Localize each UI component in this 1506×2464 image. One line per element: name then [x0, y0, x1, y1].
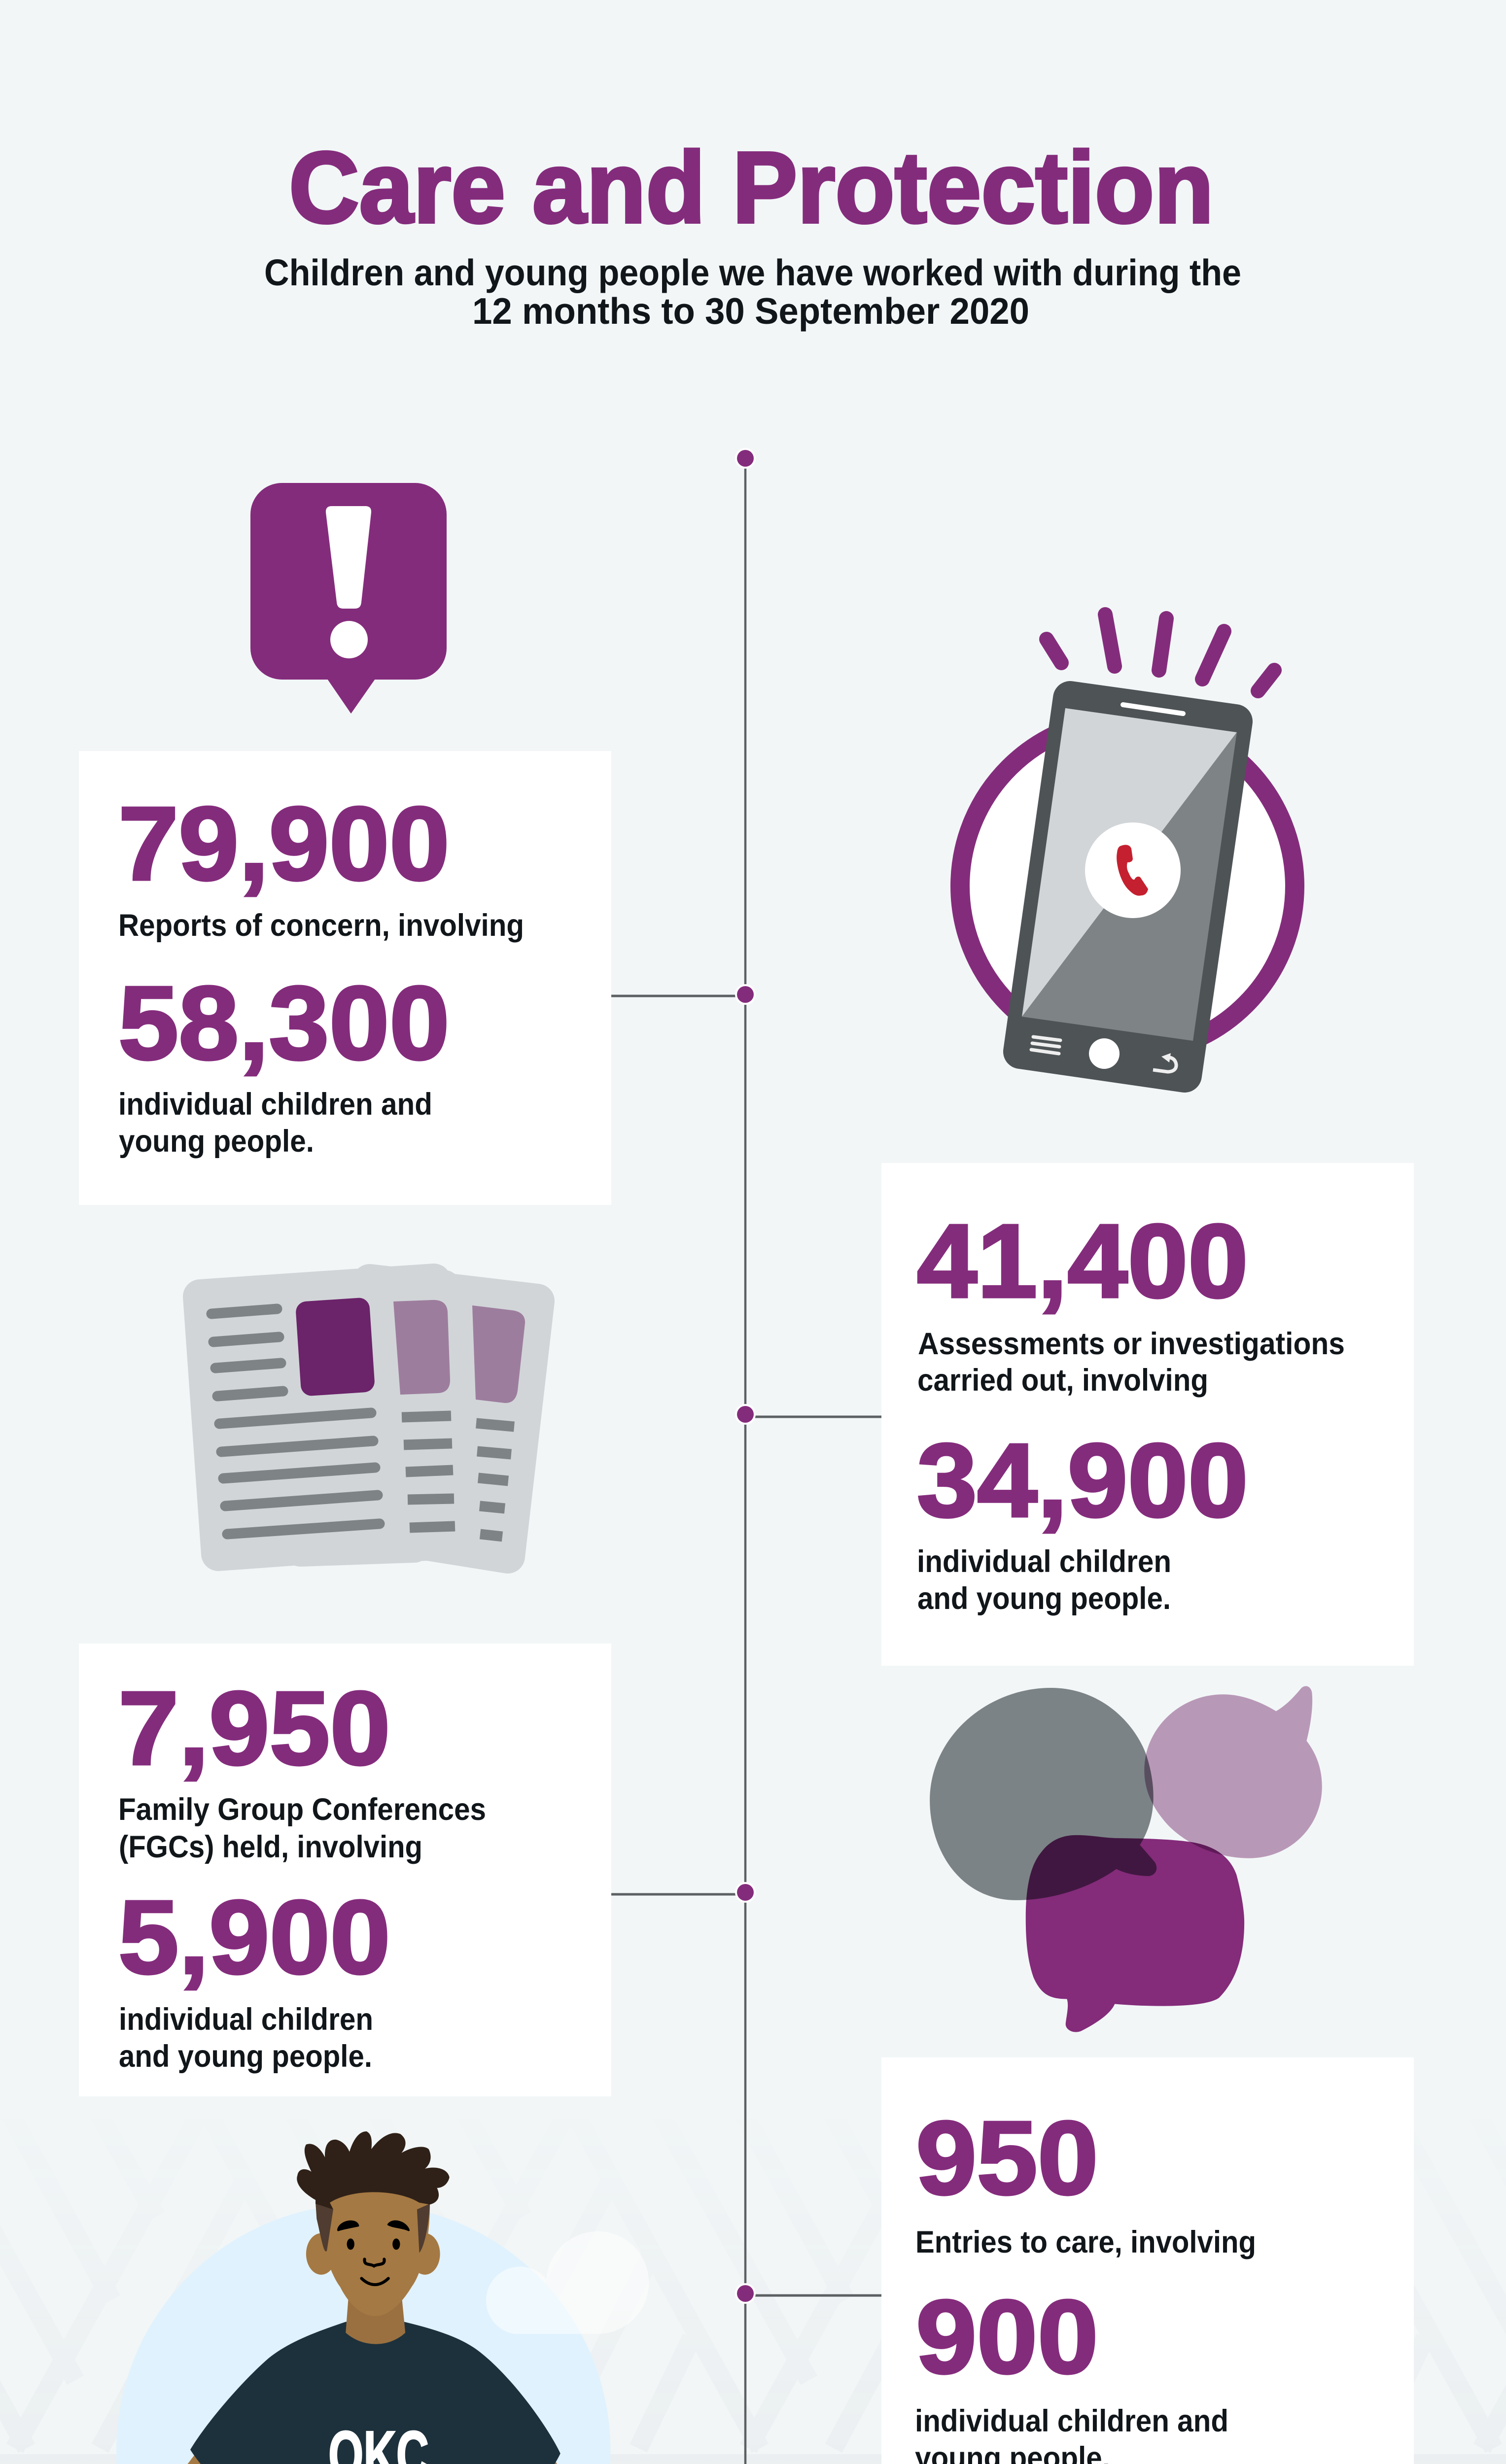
- stat: 5,900: 5,900: [118, 1879, 390, 1995]
- label: individual children: [915, 2404, 1228, 2464]
- dark purple bubble: [1026, 1835, 1244, 2032]
- stat: 7,950: 7,950: [118, 1670, 390, 1786]
- label: individual children: [119, 2002, 373, 2074]
- right picture: [472, 1305, 525, 1403]
- icon: speech bubbles: [930, 1686, 1322, 2032]
- hair: [297, 2131, 450, 2209]
- stat: 41,400: 41,400: [917, 1202, 1248, 1319]
- ringing rays: [1047, 615, 1274, 691]
- subtitle: Children and young people we have worked with during the: [264, 252, 1241, 293]
- cloud: [486, 2231, 649, 2334]
- panel: family group conferences: [79, 1643, 611, 2096]
- sideburns: [315, 2202, 333, 2252]
- middle picture: [393, 1300, 450, 1395]
- t-shirt: [190, 2322, 560, 2464]
- phone backdrop circle: [960, 719, 1295, 1054]
- icon: newspapers: [200, 1281, 537, 1556]
- subtitle: 12 months to 30 September 2020: [472, 290, 1029, 332]
- stat: 900: 900: [916, 2278, 1098, 2395]
- facial features: [338, 2221, 409, 2285]
- left column lines: [211, 1309, 380, 1534]
- label: individual children: [917, 1544, 1171, 1616]
- stat: 58,300: 58,300: [118, 964, 450, 1081]
- illustration: boy with basketball: [116, 2131, 649, 2464]
- paper sheets: [200, 1281, 537, 1556]
- label: assessments: carried out, involving: [917, 1363, 1208, 1398]
- label: individual children: individual children: [917, 1544, 1171, 1579]
- label: individual children: individual children and: [915, 2404, 1228, 2438]
- face: [315, 2190, 430, 2316]
- panel: assessments or investigations: [881, 1163, 1414, 1666]
- phone screen: [1022, 708, 1237, 1017]
- label: individual children: individual children: [119, 2002, 373, 2037]
- stat: 34,900: 34,900: [917, 1422, 1248, 1539]
- label: individual children: young people.: [119, 1124, 314, 1159]
- label: family group conferences: (FGCs) held, involving: [119, 1830, 422, 1864]
- neck: [346, 2298, 405, 2344]
- dark picture: [295, 1297, 375, 1397]
- phone body: [1020, 698, 1235, 1075]
- ears: [306, 2233, 336, 2275]
- stat: 950: 950: [916, 2099, 1098, 2216]
- label: family group conferences: [118, 1792, 486, 1864]
- title: Care and Protection: [289, 131, 1214, 244]
- label: individual children: and young people.: [119, 2039, 372, 2074]
- subtitle: [264, 252, 1241, 332]
- red handset: [1117, 845, 1148, 896]
- label: individual children: individual children and: [118, 1087, 432, 1122]
- grey bubble: [930, 1688, 1156, 1900]
- label: individual children: and young people.: [917, 1581, 1171, 1616]
- label: entries to care: Entries to care, involving: [915, 2225, 1256, 2259]
- label: assessments: [917, 1327, 1345, 1398]
- icon: alert speech bubble: [250, 483, 447, 714]
- label: individual children: [118, 1087, 432, 1159]
- light purple bubble: [1144, 1686, 1322, 1858]
- blue circle backdrop: [116, 2204, 611, 2464]
- panel: reports of concern: [79, 751, 611, 1205]
- label: assessments: Assessments or investigations: [918, 1327, 1345, 1361]
- middle and right column lines: [402, 1416, 514, 1537]
- panel: entries to care: [881, 2057, 1414, 2464]
- icon: phone ringing: [960, 615, 1295, 1075]
- stat: 79,900: 79,900: [118, 785, 450, 902]
- arms: [187, 2455, 557, 2464]
- timeline: [611, 448, 1155, 2464]
- label: reports of concern: Reports of concern, involving: [118, 908, 524, 943]
- label: family group conferences: Family Group Conferences: [118, 1792, 486, 1827]
